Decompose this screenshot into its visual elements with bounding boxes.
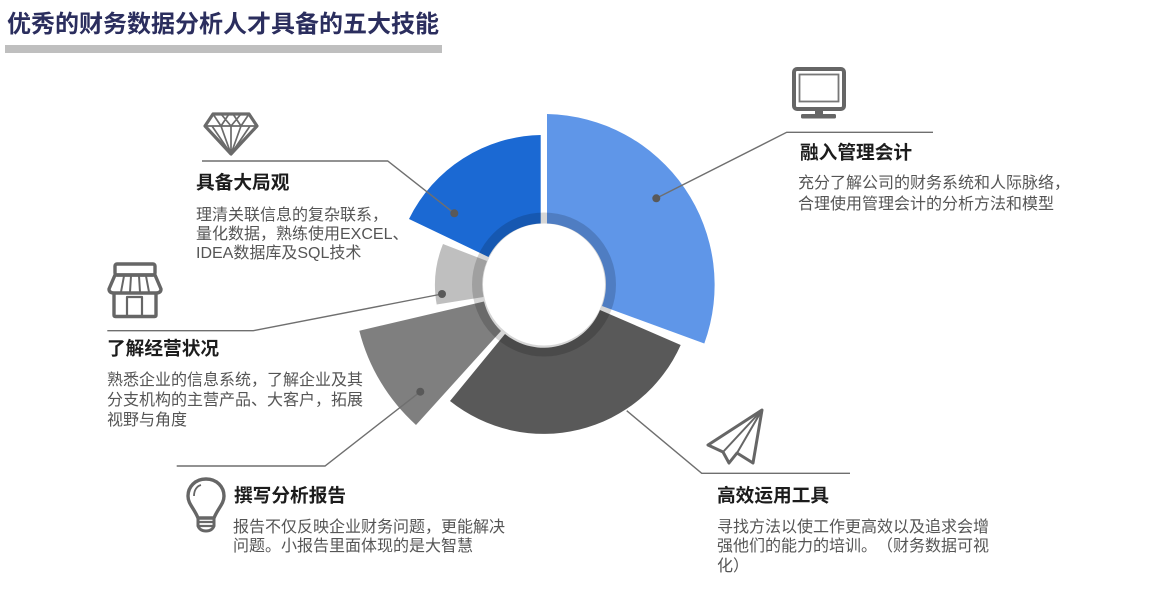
leader line: 了解经营状况 [107,290,446,331]
body text: 视野与角度 [107,412,187,429]
body text [107,371,363,429]
panel: 具备大局观 [196,112,408,262]
body text: 熟悉企业的信息系统，了解企业及其 [107,372,363,389]
segment: 具备大局观 [409,135,541,257]
segment: 了解经营状况 [435,244,487,304]
body text [717,518,989,574]
heading: 高效运用工具 [717,485,829,506]
title underline bar [5,45,442,53]
body text: 量化数据，熟练使用EXCEL、 [196,226,408,243]
panel: 撰写分析报告 [186,477,505,555]
heading: 具备大局观 [196,172,289,193]
leader line: 高效运用工具 [627,411,850,473]
icon: store [107,262,163,318]
body text [233,518,505,555]
body text: 报告不仅反映企业财务问题，更能解决 [233,518,505,536]
panel: 融入管理会计 [792,67,1070,212]
body text [196,206,408,262]
icon: paper plane [706,408,764,465]
leader line: 具备大局观 [202,161,458,217]
heading: 撰写分析报告 [234,485,346,506]
heading: 了解经营状况 [107,338,219,359]
title: 优秀的财务数据分析人才具备的五大技能 [7,11,439,38]
icon: light bulb [186,477,226,532]
panel: 了解经营状况 [107,262,363,429]
body text: 理清关联信息的复杂联系， [196,207,388,224]
body text: 化） [717,558,749,574]
body text: 分支机构的主营产品、大客户，拓展 [107,392,363,409]
body text: 强他们的能力的培训。（财务数据可视 [717,538,989,555]
body text: 合理使用管理会计的分析方法和模型 [798,196,1054,212]
leader line: 撰写分析报告 [177,388,424,466]
segment: 融入管理会计 [547,114,715,344]
panel: 高效运用工具 [706,408,989,574]
heading: 融入管理会计 [800,142,912,163]
icon: monitor [792,67,846,118]
icon: diamond [203,112,259,156]
body text: 充分了解公司的财务系统和人际脉络， [798,175,1070,192]
leader line: 融入管理会计 [652,132,933,202]
segment: 高效运用工具 [450,310,681,434]
segment: 撰写分析报告 [359,302,501,425]
body text: 寻找方法以使工作更高效以及追求会增 [717,518,989,536]
body text: 问题。小报告里面体现的是大智慧 [233,538,473,555]
body text: IDEA数据库及SQL技术 [196,245,361,262]
body text [798,174,1070,212]
inner shadow ring [478,218,610,351]
